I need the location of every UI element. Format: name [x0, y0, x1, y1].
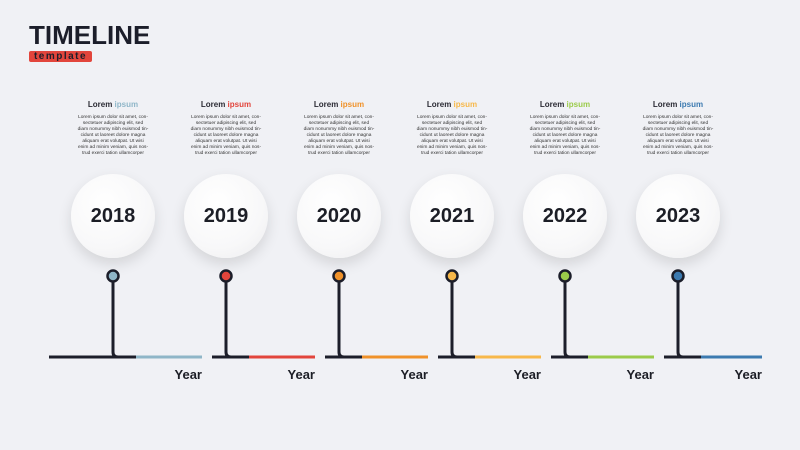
text block 2023: aliquam erat volutpat. Ut wisi: [647, 139, 709, 144]
year label: Year: [627, 367, 654, 382]
text block 2022: enim ad minim veniam, quis nos-: [530, 145, 600, 150]
text block 2020: Lorem ipsum dolor sit amet, con-: [304, 115, 374, 120]
text block 2021: [416, 100, 488, 156]
column 2020: [294, 100, 428, 382]
circle 2021: 2021: [430, 204, 474, 226]
text block 2020: Lorem ipsum: [314, 100, 364, 109]
text block 2018: aliquam erat volutpat. Ut wisi: [82, 139, 144, 144]
column 2022: [520, 100, 654, 382]
text block 2021: cidunt ut laoreet dolore magna: [420, 133, 484, 138]
text block 2018: Lorem ipsum dolor sit amet, con-: [78, 115, 148, 120]
column 2023: [632, 100, 762, 382]
text block 2021: trud exerci tation ullamcorper: [421, 151, 483, 156]
text block 2018: diam nonummy nibh euismod tin-: [78, 127, 148, 132]
text block 2022: cidunt ut laoreet dolore magna: [533, 133, 597, 138]
circle 2020: [297, 174, 381, 258]
text block 2020: sectetuer adipiscing elit, sed: [309, 121, 369, 126]
column 2021: [406, 100, 541, 382]
text block 2020: diam nonummy nibh euismod tin-: [304, 127, 374, 132]
circle 2018: 2018: [91, 204, 135, 226]
text block 2019: Lorem ipsum dolor sit amet, con-: [191, 115, 261, 120]
text block 2021: enim ad minim veniam, quis nos-: [417, 145, 487, 150]
subtitle badge: template: [34, 51, 87, 62]
title: TIMELINE: [29, 20, 150, 50]
text block 2018: enim ad minim veniam, quis nos-: [78, 145, 148, 150]
circle 2019: [184, 174, 268, 258]
text block 2019: aliquam erat volutpat. Ut wisi: [195, 139, 257, 144]
text block 2018: Lorem ipsum: [88, 100, 138, 109]
circle 2019: 2019: [204, 204, 248, 226]
text block 2019: [190, 100, 262, 156]
text block 2023: diam nonummy nibh euismod tin-: [643, 127, 713, 132]
text block 2021: aliquam erat volutpat. Ut wisi: [421, 139, 483, 144]
text block 2018: trud exerci tation ullamcorper: [82, 151, 144, 156]
year label: Year: [175, 367, 202, 382]
text block 2019: enim ad minim veniam, quis nos-: [191, 145, 261, 150]
text block 2021: sectetuer adipiscing elit, sed: [422, 121, 482, 126]
text block 2019: cidunt ut laoreet dolore magna: [194, 133, 258, 138]
text block 2018: cidunt ut laoreet dolore magna: [81, 133, 145, 138]
text block 2021: Lorem ipsum: [427, 100, 477, 109]
text block 2022: [530, 100, 600, 156]
text block 2023: enim ad minim veniam, quis nos-: [643, 145, 713, 150]
text block 2020: [304, 100, 374, 156]
year label: Year: [735, 367, 762, 382]
circle 2022: 2022: [543, 204, 587, 226]
circle 2020: 2020: [317, 204, 361, 226]
text block 2020: cidunt ut laoreet dolore magna: [307, 133, 371, 138]
text block 2022: aliquam erat volutpat. Ut wisi: [534, 139, 596, 144]
text block 2018: sectetuer adipiscing elit, sed: [83, 121, 143, 126]
text block 2022: Lorem ipsum: [540, 100, 590, 109]
text block 2020: enim ad minim veniam, quis nos-: [304, 145, 374, 150]
circle 2022: [523, 174, 607, 258]
circle 2023: 2023: [656, 204, 700, 226]
year label: Year: [288, 367, 315, 382]
text block 2019: sectetuer adipiscing elit, sed: [196, 121, 256, 126]
text block 2020: aliquam erat volutpat. Ut wisi: [308, 139, 370, 144]
text block 2023: Lorem ipsum: [653, 100, 703, 109]
text block 2022: diam nonummy nibh euismod tin-: [530, 127, 600, 132]
text block 2023: Lorem ipsum dolor sit amet, con-: [643, 115, 713, 120]
column 2019: [180, 100, 315, 382]
text block 2019: trud exerci tation ullamcorper: [195, 151, 257, 156]
circle 2023: [636, 174, 720, 258]
circle 2021: [410, 174, 494, 258]
text block 2019: diam nonummy nibh euismod tin-: [191, 127, 261, 132]
text block 2019: Lorem ipsum: [201, 100, 251, 109]
text block 2023: trud exerci tation ullamcorper: [647, 151, 709, 156]
text block 2023: cidunt ut laoreet dolore magna: [646, 133, 710, 138]
column 2018: [68, 100, 202, 382]
text block 2020: trud exerci tation ullamcorper: [308, 151, 370, 156]
text block 2022: trud exerci tation ullamcorper: [534, 151, 596, 156]
text block 2022: sectetuer adipiscing elit, sed: [535, 121, 595, 126]
text block 2021: Lorem ipsum dolor sit amet, con-: [417, 115, 487, 120]
text block 2018: [78, 100, 148, 156]
text block 2023: sectetuer adipiscing elit, sed: [648, 121, 708, 126]
text block 2023: [642, 100, 714, 156]
year label: Year: [514, 367, 541, 382]
circle 2018: [71, 174, 155, 258]
year label: Year: [401, 367, 428, 382]
text block 2022: Lorem ipsum dolor sit amet, con-: [530, 115, 600, 120]
text block 2021: diam nonummy nibh euismod tin-: [417, 127, 487, 132]
